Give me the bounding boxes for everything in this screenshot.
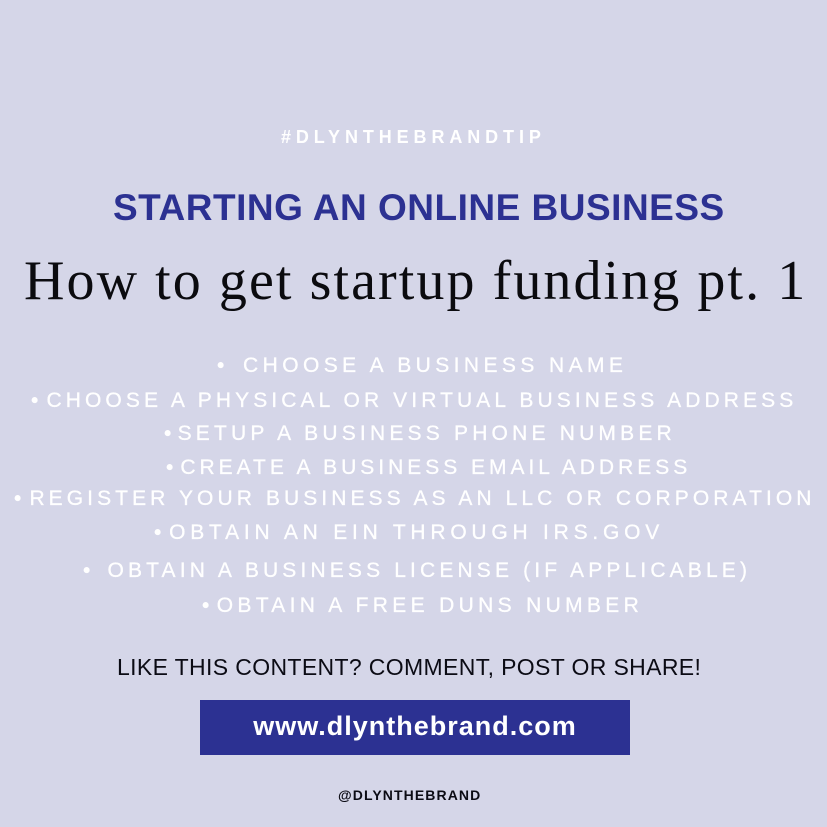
item 3: •SETUP A BUSINESS PHONE NUMBER	[164, 422, 676, 445]
item 6: •OBTAIN AN EIN THROUGH IRS.GOV	[154, 521, 664, 544]
website button	[200, 700, 630, 755]
item 8: •OBTAIN A FREE DUNS NUMBER	[202, 594, 643, 617]
social handle: @DLYNTHEBRAND	[338, 787, 481, 803]
item 4: •CREATE A BUSINESS EMAIL ADDRESS	[166, 456, 691, 479]
item 5: •REGISTER YOUR BUSINESS AS AN LLC OR CORPORATION	[14, 487, 816, 510]
hashtag heading: #DLYNTHEBRANDTIP	[281, 127, 546, 147]
subtitle: STARTING AN ONLINE BUSINESS	[113, 187, 725, 228]
item 7: • OBTAIN A BUSINESS LICENSE (IF APPLICABLE)	[83, 559, 751, 582]
item 2: •CHOOSE A PHYSICAL OR VIRTUAL BUSINESS ADDRESS	[31, 389, 797, 412]
main title: How to get startup funding pt. 1	[24, 250, 807, 312]
checklist	[14, 354, 816, 617]
item 1: • CHOOSE A BUSINESS NAME	[217, 354, 627, 377]
call to action text: LIKE THIS CONTENT? COMMENT, POST OR SHARE!	[117, 654, 701, 680]
website button: www.dlynthebrand.com	[253, 711, 577, 741]
